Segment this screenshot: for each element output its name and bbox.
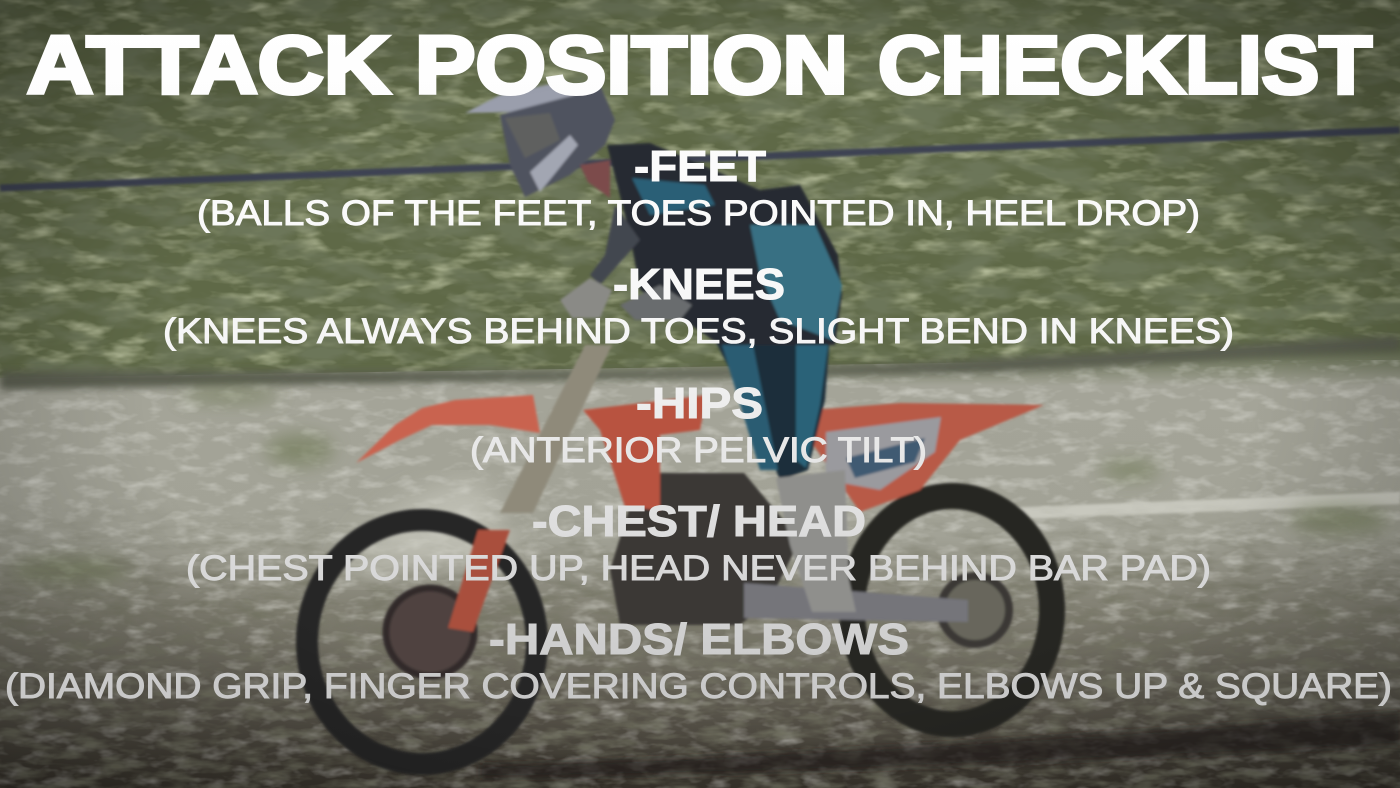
front fender (356, 395, 540, 463)
glove (560, 278, 612, 318)
title: POSITION (415, 20, 848, 111)
heading: feet: -FEET (634, 142, 766, 191)
description: feet: (BALLS OF THE FEET, TOES POINTED IN, HEEL DROP) (197, 194, 1200, 233)
checklist item: hips (470, 379, 927, 470)
motorcycle and rider (307, 82, 1052, 764)
heading: knees: -KNEES (613, 260, 785, 309)
heading: hands and elbows: -HANDS/ ELBOWS (489, 615, 909, 664)
track edge (0, 336, 1400, 390)
description: knees: (KNEES ALWAYS BEHIND TOES, SLIGHT BEND IN KNEES) (163, 312, 1234, 351)
lower dirt (0, 500, 1400, 788)
heading: chest and head: -CHEST/ HEAD (532, 497, 866, 546)
description: chest and head: (CHEST POINTED UP, HEAD NEVER BEHIND BAR PAD) (186, 549, 1211, 588)
shroud and frame (583, 395, 707, 510)
heading: hips: -HIPS (636, 379, 763, 428)
engine (610, 473, 800, 625)
title: CHECKLIST (878, 20, 1372, 111)
headlight bright area (340, 480, 520, 580)
checklist item: chest and head (186, 497, 1211, 588)
jersey panels (632, 178, 715, 215)
barrier cable (0, 130, 1400, 188)
checklist item: feet (197, 142, 1200, 233)
bike tail (810, 403, 1044, 512)
side number plate (826, 417, 941, 490)
rider torso (607, 143, 842, 345)
front wheel (307, 520, 537, 764)
arm (590, 205, 640, 285)
title: ATTACK (27, 20, 390, 111)
boot (776, 470, 856, 612)
rear wheel (852, 496, 1052, 724)
white track line (1000, 492, 1400, 520)
second hand (620, 285, 692, 320)
title (27, 20, 1372, 111)
exhaust and swingarm (744, 583, 968, 622)
fork upper tube (500, 345, 612, 513)
foliage bank (0, 0, 1400, 380)
fork lower leg (448, 530, 510, 632)
rider pants (715, 310, 832, 480)
checklist item: hands and elbows (5, 615, 1392, 706)
green patches on track (10, 387, 1390, 582)
checklist item: knees (163, 260, 1234, 351)
description: hips: (ANTERIOR PELVIC TILT) (470, 431, 927, 470)
ground shadow (480, 712, 1400, 778)
description: hands and elbows: (DIAMOND GRIP, FINGER COVERING CONTROLS, ELBOWS UP & SQUARE) (5, 667, 1392, 706)
helmet (465, 82, 615, 198)
